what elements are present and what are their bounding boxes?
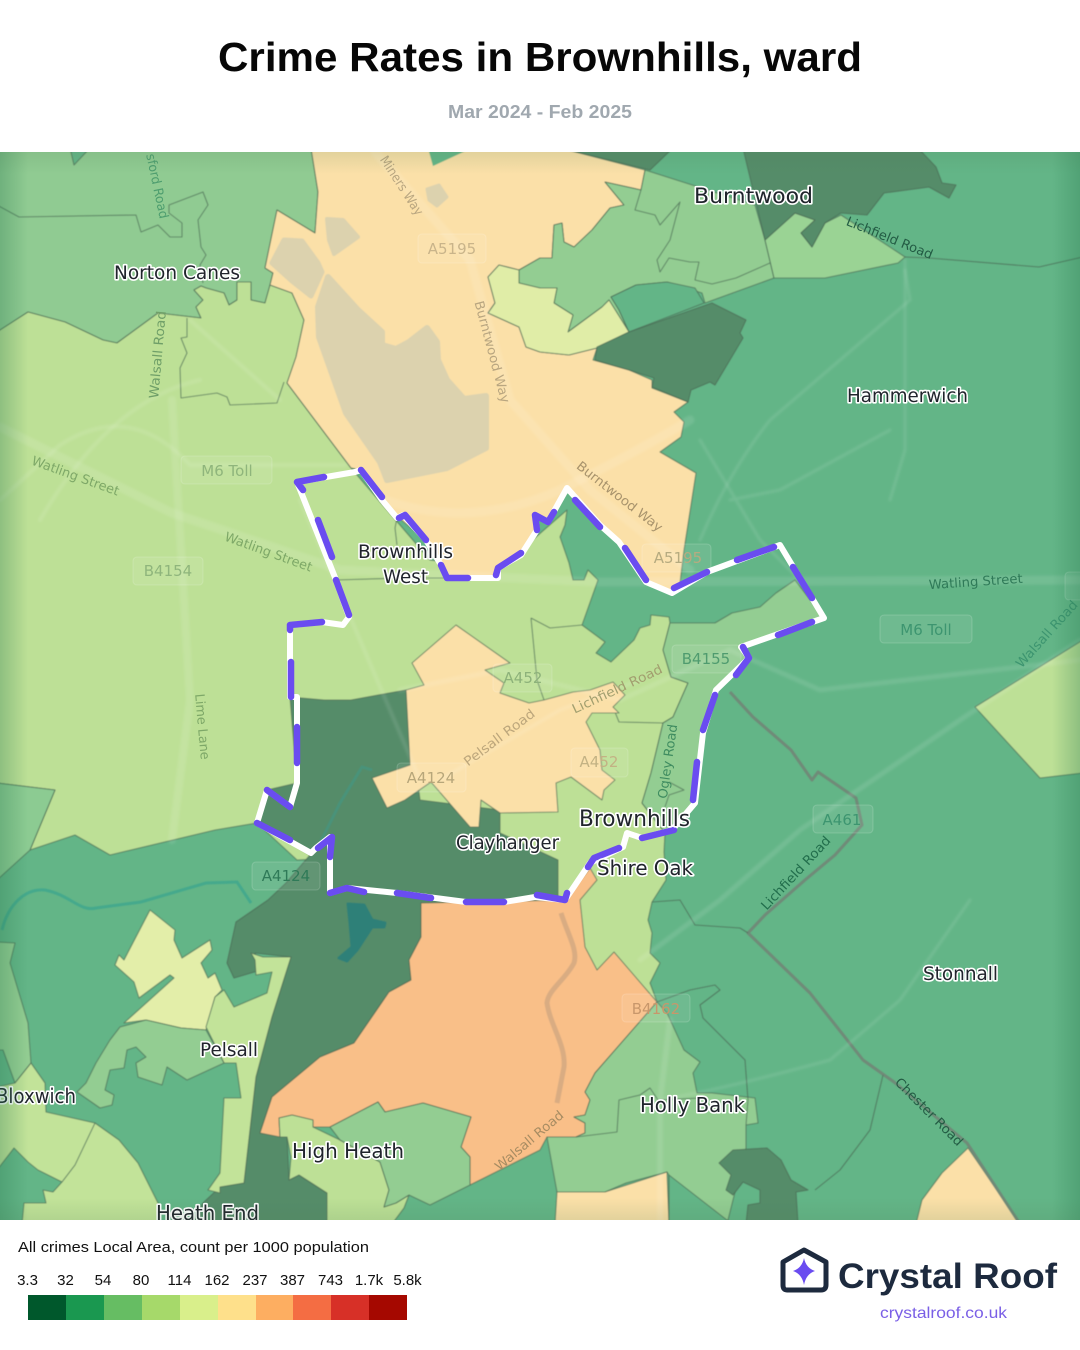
map area tiles [0, 148, 1080, 1224]
road shield: A5195 north [418, 234, 486, 263]
thin boundary: Stonnall south [815, 1075, 883, 1190]
thick boundary: county line [730, 692, 1020, 1224]
road shield: A461: A461 [823, 811, 861, 829]
place label: Pelsall: Pelsall [200, 1039, 258, 1061]
area: large west lime zone including ward centre [0, 282, 688, 1020]
road labels: rotated street names [29, 152, 1080, 1174]
place label: Clayhanger: Clayhanger [456, 832, 559, 854]
ward inner outline: tile E [336, 578, 447, 580]
thin boundary: east tile side [657, 985, 748, 1125]
choropleth map panel [0, 148, 1080, 1225]
road labels: rotated street names: Pelsall Road [461, 707, 538, 770]
place label: Holly Bank: Holly Bank [640, 1093, 745, 1117]
area: Burntwood thin outlines [635, 190, 770, 284]
logo: Crystal Roof [783, 1250, 1057, 1322]
ward dashes purple [257, 470, 812, 902]
place label: Hammerwich: Hammerwich [847, 385, 968, 407]
area: mid green north centre [519, 170, 774, 332]
area: Burntwood dark north tile [743, 148, 956, 247]
road shield: A4124 ward [397, 763, 466, 792]
river: Clayhanger waterway [318, 767, 372, 847]
lake: teal pool south of ward [339, 904, 385, 961]
legend [17, 1239, 422, 1320]
legend scale values [17, 1272, 422, 1289]
area: green tile north centre [611, 282, 704, 332]
legend title: All crimes Local Area, count per 1000 population [18, 1239, 369, 1256]
road labels: rotated street names: Walsall Road [147, 310, 170, 399]
road shield: A461 [813, 805, 873, 833]
place label: Norton Canes: Norton Canes [114, 262, 240, 284]
area: orange high crime zone [260, 868, 657, 1185]
road labels: rotated street names: Ogley Road [656, 723, 681, 800]
area: top edge tile [428, 152, 464, 166]
area: south-west thin outline [62, 1123, 95, 1182]
road shield: A4124 west: A4124 [262, 867, 310, 885]
area: Pelsall lime strip [206, 953, 291, 1193]
lake: small grey pool north [427, 185, 447, 206]
legend scale values: 3.3 [17, 1272, 38, 1289]
title: Crime Rates in Brownhills, ward [218, 34, 862, 80]
area: bottom right yellow tile [916, 1148, 1020, 1224]
lake: small grey pool west [327, 219, 358, 254]
road labels: rotated street names: Walsall Road [1013, 598, 1080, 671]
base layer: low crime green [0, 152, 1080, 1220]
road shield: M6 Toll east [880, 615, 972, 643]
icon: house with star [783, 1250, 826, 1290]
road labels: rotated street names: Burntwood Way [471, 299, 512, 405]
legend colour bar [28, 1295, 407, 1320]
road shield: A452 south: A452 [580, 753, 618, 771]
road shield: A452 north [493, 664, 552, 692]
road labels: rotated street names: Watling Street [222, 530, 314, 575]
road labels: rotated street names: Burntwood Way [573, 459, 665, 536]
road shield: A4124 west [252, 862, 320, 890]
legend scale values: 80 [133, 1272, 149, 1289]
stream: grey channel in orange zone [547, 913, 575, 1103]
area: north-west inner outline [0, 192, 208, 283]
legend scale values: 54 [95, 1272, 111, 1289]
road labels: rotated street names: Lime Lane [191, 693, 212, 760]
area: north west mid green [0, 148, 318, 343]
logo wordmark: Crystal Roof [838, 1257, 1057, 1296]
road shield: M6 Toll west [181, 456, 272, 484]
road shield: B4155 [672, 645, 741, 673]
legend scale values: 32 [57, 1272, 74, 1289]
road shield: B4162: B4162 [632, 1000, 680, 1018]
ward boundary: white line with purple dashes [257, 470, 824, 902]
lake: grey upper left [272, 240, 322, 296]
road labels: rotated street names: Lichfield Road [759, 834, 834, 913]
road shield: A452 north: A452 [504, 669, 542, 687]
ward inner outline: tile F [395, 518, 397, 545]
road labels: rotated street names: Chester Road [891, 1075, 966, 1150]
road shield: B4155: B4155 [682, 650, 730, 668]
place label: Brownhills West: Brownhills [358, 541, 453, 563]
area: ward east mid green [642, 580, 824, 833]
road labels: rotated street names: sford Road [142, 152, 171, 220]
area: dark green ward south and strip [190, 690, 558, 1224]
road labels: rotated street names: Miners Way [376, 153, 426, 219]
area: yellow central Brownhills [372, 625, 625, 827]
area: dark tile south [719, 1148, 808, 1224]
place label: Brownhills: Brownhills [579, 807, 690, 832]
legend scale values: 743 [318, 1272, 343, 1289]
area: Pelsall south mid tile [77, 1020, 224, 1108]
place label: Burntwood: Burntwood [694, 184, 813, 208]
area: small triangle on top edge [70, 152, 88, 166]
ward outline white [257, 470, 824, 902]
area: yellow north zone [265, 148, 696, 593]
road shield: right edge [1065, 572, 1080, 600]
area: bottom base tile [668, 1174, 728, 1220]
boundary line: north-east [905, 257, 1080, 267]
legend scale values: 1.7k [355, 1272, 384, 1289]
canal: teal waterway south west [2, 882, 251, 930]
area: bottom yellow tile [555, 1172, 669, 1224]
place label: Shire Oak: Shire Oak [597, 856, 693, 880]
place label: Heath End: Heath End [156, 1201, 259, 1225]
area: Holly Bank mid green [547, 1002, 758, 1224]
subtitle: date range: Mar 2024 - Feb 2025 [448, 102, 632, 122]
legend scale values: 237 [242, 1272, 268, 1289]
legend scale values: 5.8k [393, 1272, 422, 1289]
area: south-west base tile [0, 1148, 62, 1224]
road labels: rotated street names: Lichfield Road [570, 662, 665, 717]
area: Burntwood dark south tile [595, 303, 746, 402]
road labels: rotated street names: Walsall Road [492, 1108, 567, 1174]
road network: faint light strokes [0, 152, 1080, 1220]
area: left lower mid tile [0, 783, 55, 880]
road labels: rotated street names: Lichfield Road [844, 215, 935, 263]
ward inner outline: tile A [531, 618, 544, 700]
road shield: M6 Toll west: M6 Toll [201, 462, 253, 480]
map edge vignette [0, 152, 1080, 1220]
road shield: A452 south [571, 748, 628, 777]
area: High Heath lime tile [279, 1115, 409, 1224]
area: right lime tile [975, 640, 1080, 778]
legend scale values: 162 [204, 1272, 230, 1289]
website url: crystalroof.co.uk [880, 1305, 1008, 1322]
place label: High Heath: High Heath [292, 1139, 404, 1163]
ward inner outline: tile D [665, 782, 684, 807]
legend scale values: 114 [168, 1272, 191, 1289]
road shield: B4162 [622, 994, 690, 1022]
area: Bloxwich lime tile [0, 1063, 160, 1224]
ward inner outline: tile B [531, 618, 582, 628]
area: Pelsall pale tile [115, 910, 222, 1030]
road shield: B4154: B4154 [144, 562, 192, 580]
legend scale values: 387 [280, 1272, 305, 1289]
road shield: A4124 ward: A4124 [407, 769, 455, 787]
road labels: rotated street names: Watling Street [29, 454, 121, 499]
area: pale tile north centre [488, 265, 629, 355]
area: Lichfield Road light tile [765, 213, 905, 278]
road shield: A5195 ward [642, 544, 711, 572]
road shield: A5195 ward: A5195 [654, 549, 702, 567]
ward inner outline: tile C [614, 712, 663, 724]
thin boundary: east tile top [652, 900, 748, 933]
lake: grey water in yellow zone [318, 277, 486, 480]
road shield: B4154 [133, 557, 203, 585]
area: top edge dark strip [575, 152, 670, 171]
area: Holly Bank inner outline [576, 1088, 700, 1137]
road shield: A5195 north: A5195 [428, 240, 476, 258]
road shield: M6 Toll east: M6 Toll [900, 621, 952, 639]
road labels: rotated street names: Watling Street [928, 572, 1023, 593]
area: High Heath mid tile [330, 1102, 471, 1207]
place label: Stonnall: Stonnall [923, 963, 998, 985]
place label: Brownhills West [358, 541, 453, 588]
area: Norton Canes lime cell outline [180, 318, 284, 405]
place label: Brownhills West: West [383, 566, 428, 588]
area: far left mid tile [0, 942, 31, 1083]
